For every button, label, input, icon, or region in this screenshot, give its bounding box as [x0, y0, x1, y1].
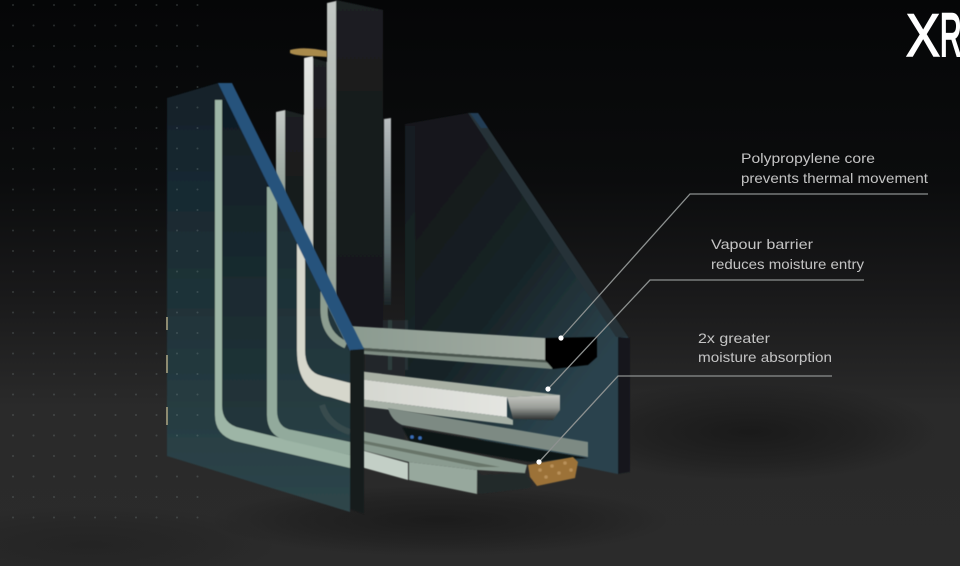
- third spacer seen through glass: [297, 243, 350, 403]
- callout 3 text: [698, 330, 832, 365]
- callout 3 text: 2x greater: [698, 330, 770, 346]
- front glass pane: [167, 83, 364, 514]
- second spacer seen through glass: [267, 187, 350, 455]
- black core end: [545, 337, 597, 369]
- profile: polypropylene core: [350, 326, 597, 369]
- edge glints: [166, 317, 168, 425]
- top spacer curve through glass: [324, 285, 346, 345]
- callout 2 text: [711, 236, 864, 272]
- front spacer seen through glass: [215, 100, 350, 468]
- gold seal on top: [290, 48, 327, 57]
- floor shadows: [0, 382, 940, 566]
- profile: desiccant channel: [350, 429, 532, 494]
- logo: [906, 2, 960, 70]
- profile: third spacer: [388, 408, 588, 462]
- interior tint between spacers: [222, 100, 285, 440]
- callout 1 text: [741, 150, 928, 186]
- callout 1 leader: [558, 194, 928, 341]
- callout 1 text: prevents thermal movement: [741, 170, 928, 186]
- blue glass edge: [218, 83, 364, 351]
- callout 2 leader: [545, 280, 864, 392]
- inner dark panels and bars: [276, 0, 408, 440]
- callout 3 text: moisture absorption: [698, 349, 832, 365]
- dot grid over glass: [167, 90, 205, 455]
- black glass edge: [350, 349, 364, 514]
- vapour barrier end cap: [507, 395, 560, 420]
- logo: X: [906, 2, 940, 69]
- cork desiccant: [528, 457, 578, 486]
- profile: vapour barrier: [350, 370, 560, 425]
- dot grid: [0, 0, 205, 530]
- hidden spacer curve through glass: [322, 405, 350, 432]
- callout 2 text: Vapour barrier: [711, 236, 813, 252]
- back glass pane: [405, 113, 630, 474]
- callout 1 text: Polypropylene core: [741, 150, 875, 166]
- callout 2 text: reduces moisture entry: [711, 256, 864, 272]
- callout 3 leader: [536, 376, 832, 465]
